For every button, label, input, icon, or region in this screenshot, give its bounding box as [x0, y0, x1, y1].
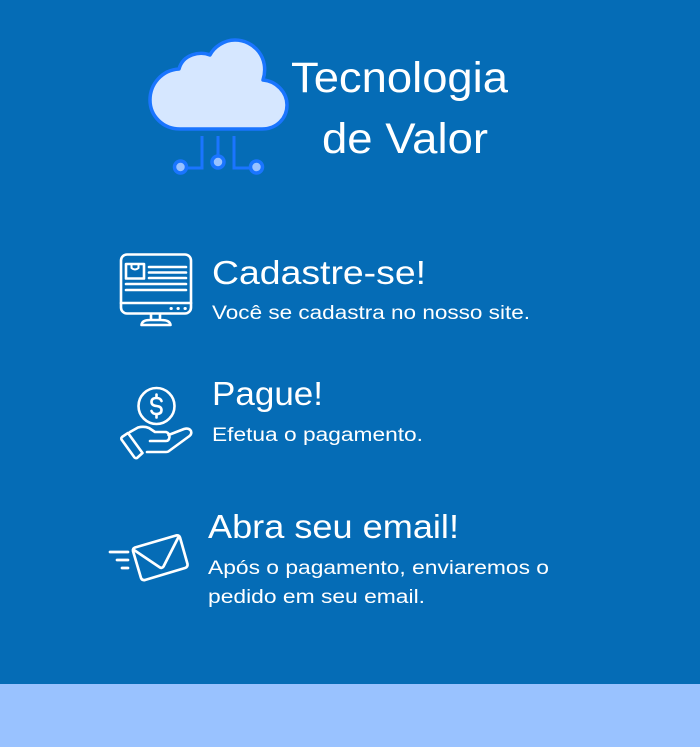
icon: computer monitor	[121, 254, 191, 325]
heading: Pague!	[212, 375, 323, 412]
description: Após o pagamento, enviaremos o	[208, 558, 549, 579]
footer band	[0, 684, 700, 747]
step 2: pay	[121, 375, 423, 458]
icon: flying envelope	[110, 535, 188, 580]
description: Efetua o pagamento.	[212, 425, 423, 446]
description	[208, 558, 549, 608]
heading: Abra seu email!	[208, 508, 459, 545]
title: de Valor	[322, 115, 488, 163]
icon: cloud with circuit	[150, 40, 287, 173]
step 3: email	[110, 508, 549, 608]
title: Tecnologia	[291, 54, 508, 102]
description: Você se cadastra no nosso site.	[212, 303, 530, 324]
step 1: register	[121, 254, 530, 325]
description: pedido em seu email.	[208, 587, 425, 608]
icon: hand holding coin	[121, 388, 191, 458]
heading: Cadastre-se!	[212, 254, 426, 291]
title	[291, 54, 508, 163]
